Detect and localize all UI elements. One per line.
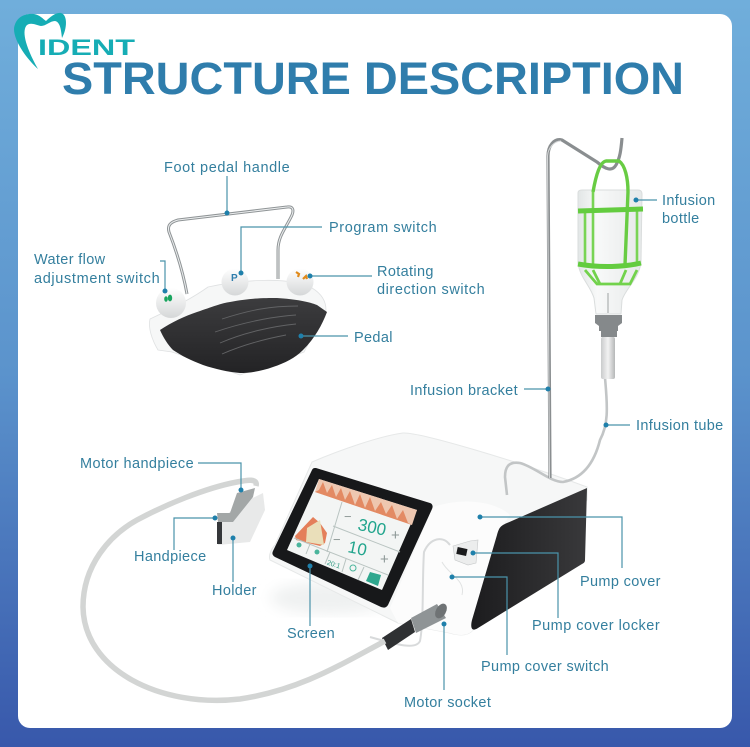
- label: rotating direction switch: Rotating: [377, 264, 434, 280]
- label: pump cover: Pump cover: [580, 574, 661, 590]
- screen: 20:1: [326, 560, 341, 571]
- label: infusion bottle: bottle: [662, 211, 700, 227]
- motor handpiece: [217, 488, 255, 522]
- holder: [218, 493, 265, 545]
- motor socket connector: [382, 602, 449, 650]
- infusion stand: [505, 138, 643, 495]
- water switch: [156, 288, 186, 318]
- label: foot pedal handle: Foot pedal handle: [164, 160, 290, 176]
- label: pedal: Pedal: [354, 330, 393, 346]
- title: STRUCTURE DESCRIPTION: [62, 53, 684, 104]
- labels: [34, 160, 724, 711]
- foot pedal: [149, 207, 327, 375]
- label: rotating direction switch: direction switch: [377, 282, 485, 298]
- handpiece group: [217, 488, 265, 545]
- pedal body: [149, 280, 326, 375]
- infusion tube: [505, 378, 607, 495]
- callout lines and dots: [160, 176, 657, 690]
- logo text: IDENT: [38, 35, 136, 60]
- label: water flow adjustment switch: adjustment switch: [34, 271, 160, 287]
- label: holder: Holder: [212, 583, 257, 599]
- screen: −: [333, 532, 341, 547]
- label: infusion bottle: Infusion: [662, 193, 716, 209]
- infusion bottle: [578, 161, 643, 314]
- pedal handle: [168, 207, 293, 294]
- connector details: [370, 539, 450, 646]
- label: infusion tube: Infusion tube: [636, 418, 724, 434]
- label: water flow adjustment switch: Water flow: [34, 252, 105, 268]
- screen: [272, 468, 433, 608]
- screen: 300: [356, 515, 388, 540]
- label: handpiece: Handpiece: [134, 549, 206, 565]
- screen: +: [380, 551, 389, 568]
- pump locker: [453, 540, 478, 565]
- shadow: [270, 582, 390, 614]
- label: motor handpiece: Motor handpiece: [80, 456, 194, 472]
- dark side: [471, 488, 587, 630]
- screen: +: [391, 527, 400, 544]
- label: infusion bracket: Infusion bracket: [410, 383, 518, 399]
- icon: tooth: [14, 13, 66, 69]
- label: program switch: Program switch: [329, 220, 437, 236]
- bracket rod: [548, 138, 622, 478]
- program switch: [222, 268, 248, 296]
- label: pump cover locker: Pump cover locker: [532, 618, 660, 634]
- motor cord: [83, 480, 385, 700]
- pedal plate: [160, 298, 327, 373]
- screen: −: [344, 509, 352, 524]
- program switch: P: [231, 273, 238, 284]
- white housing: [269, 433, 587, 635]
- label: screen: Screen: [287, 626, 335, 642]
- logo: [14, 13, 136, 69]
- direction switch: [286, 268, 314, 296]
- screen: 10: [346, 537, 369, 560]
- label: pump cover switch: Pump cover switch: [481, 659, 609, 675]
- drip chamber: [595, 315, 622, 379]
- main device: [269, 433, 587, 650]
- label: motor socket: Motor socket: [404, 695, 491, 711]
